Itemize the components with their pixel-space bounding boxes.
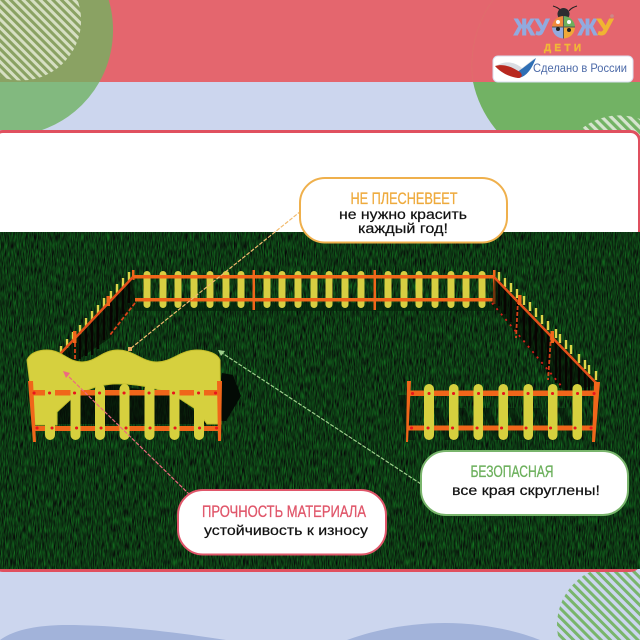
bolts (34, 393, 217, 428)
callout body: все края скруглены! (452, 483, 600, 498)
icon: flag swoosh (495, 58, 536, 78)
badge: made in Russia (493, 56, 633, 82)
logo: ЖУЖУ ДЕТИ: У (597, 14, 614, 40)
logo letters: ЖУ (513, 14, 550, 40)
arrow: green dashed to panel edge (218, 350, 421, 484)
decorative circle: top right green (472, 0, 640, 135)
callout: does not mold: каждый год! (358, 221, 448, 236)
fence: back side (132, 270, 496, 311)
logo: ЖУЖУ ДЕТИ: Ж (577, 14, 597, 40)
arrow: pink dashed to panel face (63, 371, 190, 495)
main photo panel (0, 132, 640, 570)
decorative circle: bottom right hatched (557, 571, 640, 640)
callout heading: БЕЗОПАСНАЯ (470, 462, 554, 481)
fence: right side in perspective (492, 272, 598, 394)
decorative waves: bottom (0, 623, 540, 640)
icon: ladybug (552, 6, 577, 38)
fence: front left with wavy yellow panel (27, 350, 241, 442)
fence: front right (398, 381, 600, 442)
grass field (0, 232, 640, 569)
callout body: не нужно красить (339, 207, 467, 222)
callout heading: ПРОЧНОСТЬ МАТЕРИАЛА (202, 502, 366, 521)
logo: ЖУЖУ ДЕТИ (513, 6, 614, 54)
fence: left side in perspective (60, 272, 135, 372)
pickets (45, 384, 55, 440)
callout body: устойчивость к износу (204, 523, 368, 538)
background: top red band (0, 0, 640, 82)
wavy panel (27, 350, 221, 425)
callout: material strength (178, 490, 386, 554)
callout heading: НЕ ПЛЕСНЕВЕЕТ (350, 189, 458, 208)
callout: does not mold (300, 178, 507, 242)
callout: safe (421, 451, 628, 515)
logo: ЖУЖУ ДЕТИ: ДЕТИ (544, 43, 581, 54)
badge text: Сделано в России (533, 63, 627, 75)
arrow: orange dashed to panel top (128, 211, 301, 351)
decorative circle: top left green (0, 0, 113, 130)
rails and posts (33, 390, 221, 396)
